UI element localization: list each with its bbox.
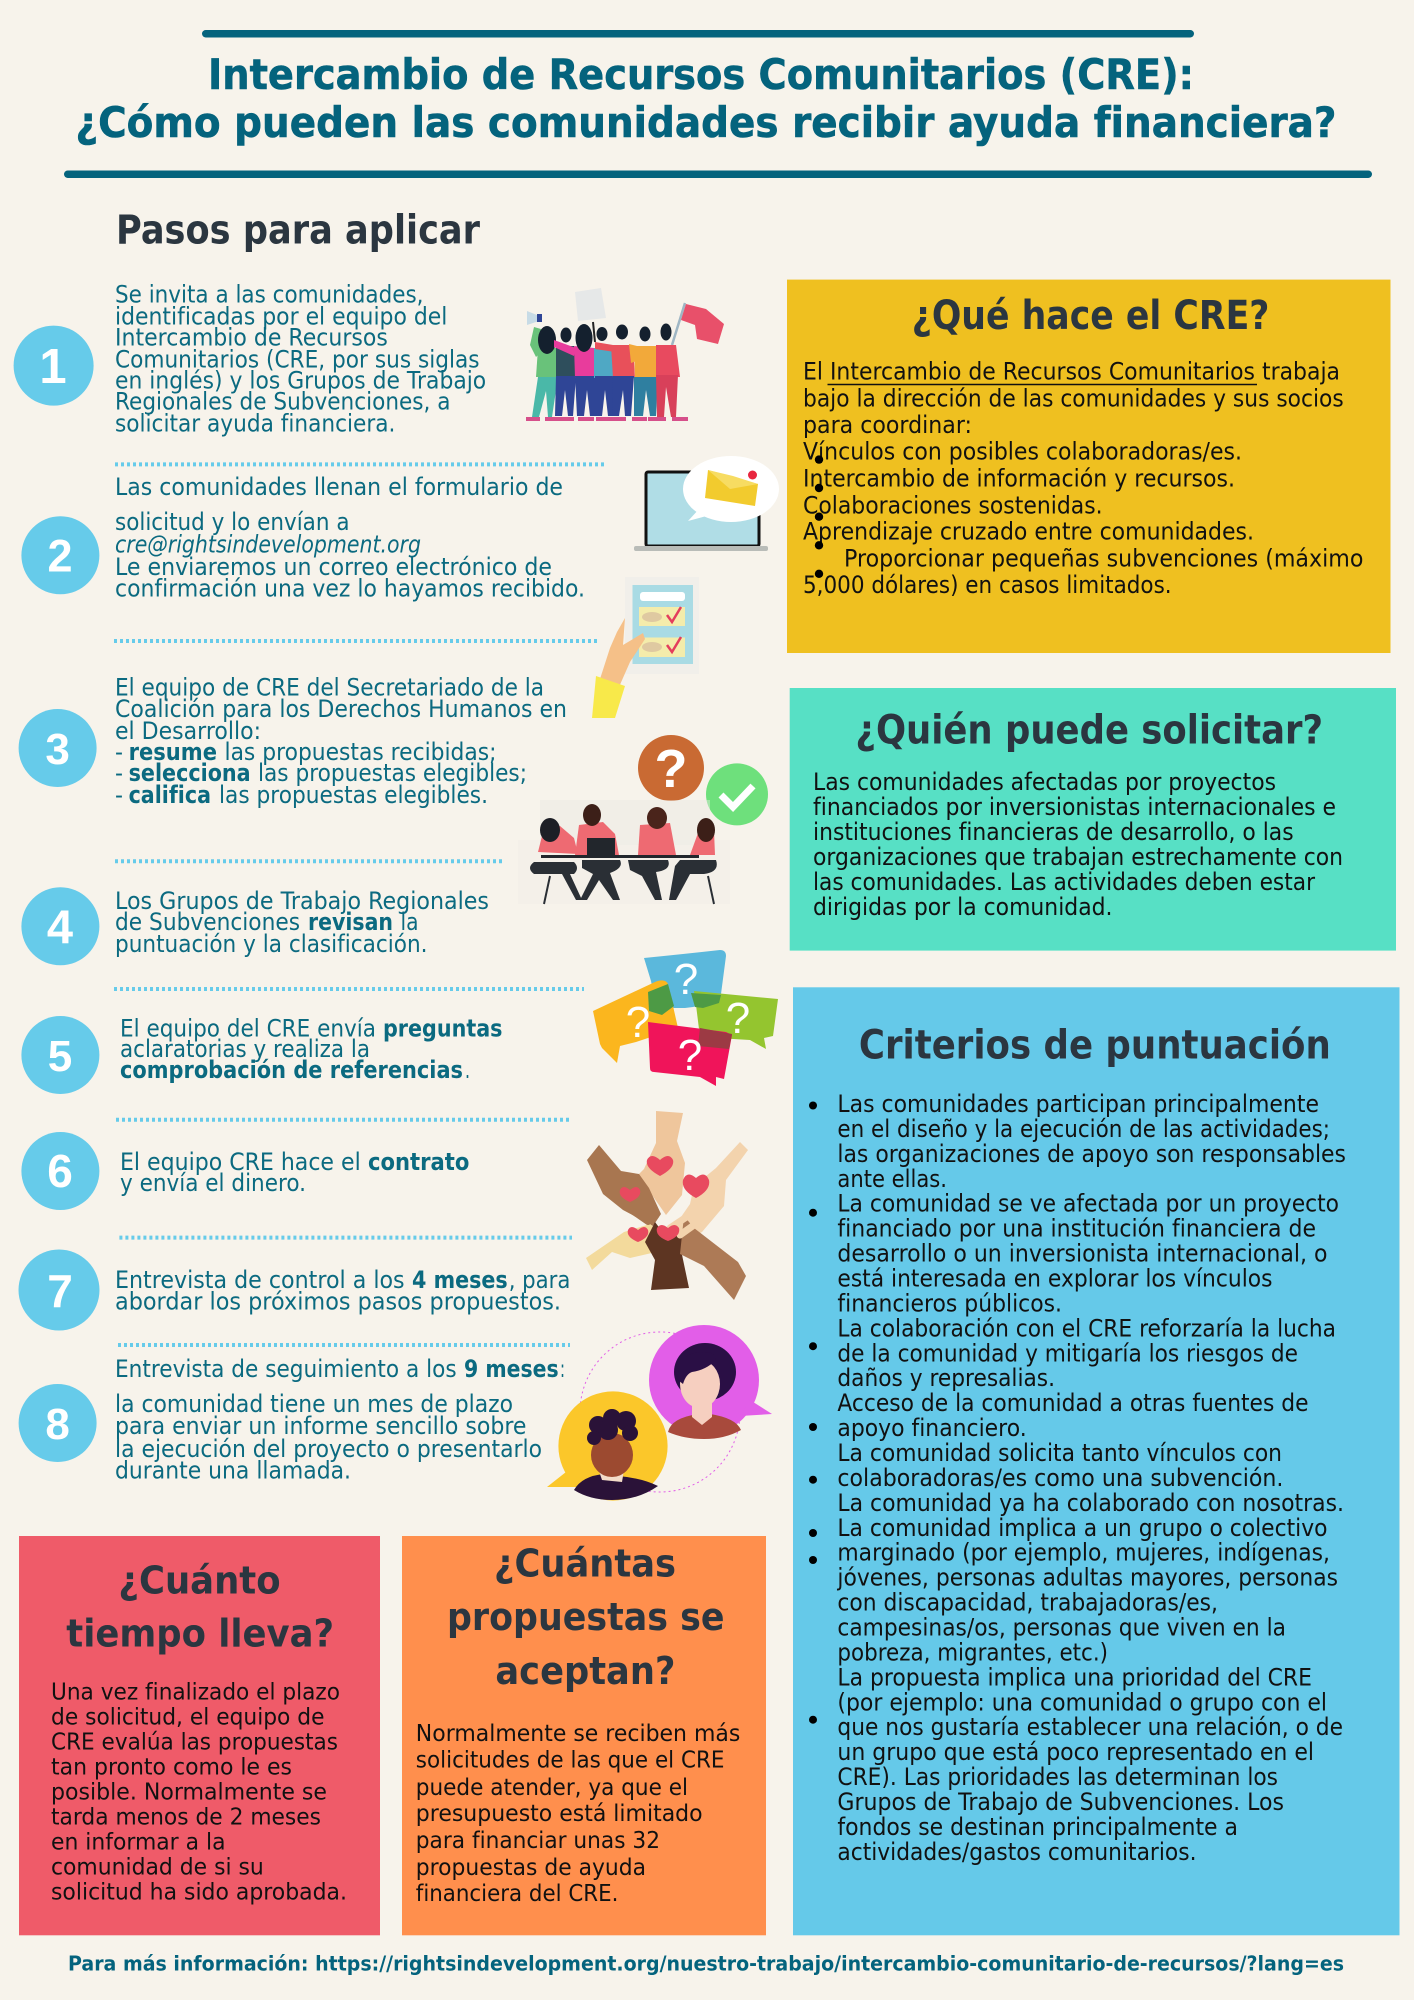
step 4 number xyxy=(21,887,99,965)
step 6 text: El equipo CRE hace el xyxy=(120,1148,361,1176)
step 1 text: Se invita a las comunidades, xyxy=(115,280,424,308)
step 4 text: Los Grupos de Trabajo Regionales xyxy=(115,887,489,915)
step 4 text: de Subvenciones xyxy=(115,908,300,936)
body text: Las comunidades afectadas por proyectos xyxy=(813,768,1276,796)
step 3 text: - xyxy=(115,738,123,766)
step 5 text: El equipo del CRE envía xyxy=(120,1014,376,1042)
criteria list: un grupo que está poco representado en el xyxy=(837,1738,1314,1766)
criteria list: CRE). Las prioridades las determinan los xyxy=(837,1763,1278,1791)
step 3 text: las propuestas recibidas; xyxy=(224,738,496,766)
step 3 number: 3 xyxy=(45,725,70,774)
heading: cuanto tiempo xyxy=(66,1558,334,1656)
heading: pasos para aplicar: Pasos para aplicar xyxy=(116,208,480,254)
body text: solicitudes de las que el CRE xyxy=(416,1748,724,1774)
step 2 text: confirmación una vez lo hayamos recibido. xyxy=(115,574,585,602)
body text: Intercambio de información y recursos. xyxy=(803,464,1235,492)
heading: cuanto tiempo: tiempo lleva? xyxy=(66,1612,334,1656)
body text: El Intercambio de Recursos Comunitarios trabaja xyxy=(803,358,1340,386)
criteria list: apoyo financiero. xyxy=(837,1414,1027,1442)
step 3 text: - xyxy=(115,759,123,787)
body text: dirigidas por la comunidad. xyxy=(813,893,1112,921)
step 4 text: puntuación y la clasificación. xyxy=(115,930,428,958)
step 6 number: 6 xyxy=(47,1145,73,1197)
step 1 text: solicitar ayuda financiera. xyxy=(115,410,395,438)
bullets xyxy=(809,1102,817,1724)
step 2 text: Las comunidades llenan el formulario de xyxy=(115,473,563,501)
criteria list: jóvenes, personas adultas mayores, personas xyxy=(836,1564,1338,1592)
step 5 text: preguntas xyxy=(383,1014,502,1042)
step 8 text: la comunidad tiene un mes de plazo xyxy=(115,1390,513,1418)
icon: overlapping speech bubbles with question marks: ? xyxy=(626,998,650,1047)
body text: financiados por inversionistas internacionales e xyxy=(813,793,1336,821)
step 7 text: abordar los próximos pasos propuestos. xyxy=(115,1288,561,1316)
step 2 number xyxy=(21,516,99,594)
step 3 text: - xyxy=(115,781,123,809)
step 3 text: el Desarrollo: xyxy=(115,717,261,745)
icon: overlapping speech bubbles with question marks: ? xyxy=(726,994,750,1043)
step 2 number: 2 xyxy=(47,530,73,582)
panel: cuanto tiempo lleva xyxy=(19,1536,380,1935)
icon: question mark and check badges xyxy=(638,735,768,825)
step 7 number xyxy=(18,1250,100,1330)
icon: team meeting around a table xyxy=(518,800,730,904)
step 3 text: las propuestas elegibles. xyxy=(219,781,488,809)
body text: bajo la dirección de las comunidades y sus socios xyxy=(803,384,1344,412)
step 5 text xyxy=(120,1014,502,1084)
criteria list: colaboradoras/es como una subvención. xyxy=(837,1464,1283,1492)
title xyxy=(64,30,1372,178)
heading: cuantas propuestas: ¿Cuántas xyxy=(494,1542,676,1586)
step 5 text: . xyxy=(465,1056,470,1084)
criteria list: las organizaciones de apoyo son responsables xyxy=(837,1140,1346,1168)
body text: 5,000 dólares) en casos limitados. xyxy=(803,571,1172,599)
step 7 number: 7 xyxy=(47,1265,73,1317)
step 8 text: para enviar un informe sencillo sobre xyxy=(115,1412,526,1440)
body text: para financiar unas 32 xyxy=(416,1828,660,1854)
step 8 number: 8 xyxy=(45,1400,70,1449)
step 5 text: comprobación de referencias xyxy=(120,1056,463,1084)
step 1 text: Comunitarios (CRE, por sus siglas xyxy=(115,346,480,374)
step 4 text xyxy=(115,887,489,958)
criteria list: de la comunidad y mitigaría los riesgos de xyxy=(837,1339,1298,1367)
step 3 text xyxy=(115,674,567,809)
body text: posible. Normalmente se xyxy=(51,1779,327,1805)
body text: propuestas de ayuda xyxy=(416,1855,646,1881)
body text: Una vez finalizado el plazo xyxy=(51,1679,340,1705)
step 1 text: en inglés) y los Grupos de Trabajo xyxy=(115,367,486,395)
criteria list: La comunidad se ve afectada por un proyecto xyxy=(837,1190,1339,1218)
step 6 text: y envía el dinero. xyxy=(120,1169,306,1197)
body text xyxy=(803,358,1363,599)
body text: presupuesto está limitado xyxy=(416,1801,703,1827)
step 4 text: revisan xyxy=(308,908,393,936)
criteria list: daños y represalias. xyxy=(837,1364,1055,1392)
criteria list: financieros públicos. xyxy=(837,1289,1062,1317)
body text: Normalmente se reciben más xyxy=(416,1721,740,1747)
heading: cuanto tiempo: ¿Cuánto xyxy=(118,1558,281,1602)
step 5 number: 5 xyxy=(48,1032,72,1081)
criteria list: (por ejemplo: una comunidad o grupo con el xyxy=(837,1688,1327,1716)
step 7 text xyxy=(115,1266,570,1316)
criteria list: en el diseño y la ejecución de las actividades; xyxy=(837,1115,1330,1143)
criteria list: La comunidad solicita tanto vínculos con xyxy=(837,1439,1282,1467)
bullets xyxy=(815,455,823,578)
step 2 text: Le enviaremos un correo electrónico de xyxy=(115,553,552,581)
criteria list: con discapacidad, trabajadoras/es, xyxy=(837,1589,1218,1617)
step 1 number xyxy=(14,326,94,406)
criteria list: Las comunidades participan principalmente xyxy=(837,1090,1319,1118)
heading: que hace: ¿Qué hace el CRE? xyxy=(912,293,1269,339)
step 8 number xyxy=(19,1384,97,1462)
criteria list: que nos gustaría establecer una relación, o de xyxy=(837,1713,1343,1741)
step 3 number xyxy=(19,709,97,787)
criteria list: campesinas/os, personas que viven en la xyxy=(837,1614,1286,1642)
step 3 text: Coalición para los Derechos Humanos en xyxy=(115,695,567,723)
body text: Vínculos con posibles colaboradoras/es. xyxy=(803,438,1242,466)
criteria list: actividades/gastos comunitarios. xyxy=(837,1838,1196,1866)
body text: instituciones financieras de desarrollo, o las xyxy=(813,818,1294,846)
panel: que hace el CRE xyxy=(787,280,1390,653)
step 8 text xyxy=(115,1355,565,1484)
step 3 text: El equipo de CRE del Secretariado de la xyxy=(115,674,544,702)
step 1 text: Regionales de Subvenciones, a xyxy=(115,387,450,415)
body text: las comunidades. Las actividades deben estar xyxy=(813,868,1315,896)
criteria list: pobreza, migrantes, etc.) xyxy=(837,1638,1108,1666)
icon: hand ticking a checklist xyxy=(592,577,699,718)
criteria list: La propuesta implica una prioridad del CRE xyxy=(837,1663,1312,1691)
footer link: Para más información: https://rightsindevelopment.org/nuestro-trabajo/intercambio-comunitario-de-recursos/?lang=es xyxy=(68,1952,1344,1976)
body text: solicitud ha sido aprobada. xyxy=(51,1879,347,1905)
body text: puede atender, ya que el xyxy=(416,1775,688,1801)
panel: cuantas propuestas se aceptan xyxy=(402,1536,766,1935)
body text: tarda menos de 2 meses xyxy=(51,1804,321,1830)
body text xyxy=(51,1679,347,1905)
body text: Colaboraciones sostenidas. xyxy=(803,492,1103,520)
step 6 text xyxy=(120,1148,469,1197)
step 8 text: la ejecución del proyecto o presentarlo xyxy=(115,1435,542,1463)
step 2 text: solicitud y lo envían a xyxy=(115,508,350,536)
step 1 number: 1 xyxy=(39,340,67,394)
step 8 text: 9 meses xyxy=(464,1355,559,1383)
criteria list: marginado (por ejemplo, mujeres, indígenas, xyxy=(837,1539,1330,1567)
step 3 text: califica xyxy=(129,781,211,809)
criteria list: Grupos de Trabajo de Subvenciones. Los xyxy=(837,1788,1284,1816)
step 7 text: Entrevista de control a los xyxy=(115,1266,405,1294)
icon: laptop with envelope message xyxy=(634,456,779,551)
panel: criterios de puntuacion xyxy=(793,987,1400,1935)
step 1 text: Intercambio de Recursos xyxy=(115,324,388,352)
criteria list xyxy=(836,1090,1346,1866)
body text: Aprendizaje cruzado entre comunidades. xyxy=(803,518,1254,546)
icon: two people in speech bubbles xyxy=(547,1325,772,1501)
body text: organizaciones que trabajan estrechamente con xyxy=(813,843,1343,871)
heading: quien puede: ¿Quién puede solicitar? xyxy=(855,708,1323,754)
body text xyxy=(416,1721,740,1907)
title: ¿Cómo pueden las comunidades recibir ayuda financiera? xyxy=(76,98,1336,147)
criteria list: está interesada en explorar los vínculos xyxy=(837,1264,1272,1292)
criteria list: La comunidad ya ha colaborado con nosotras. xyxy=(837,1489,1344,1517)
step 5 text: aclaratorias y realiza la xyxy=(120,1035,370,1063)
criteria list: Acceso de la comunidad a otras fuentes de xyxy=(837,1389,1308,1417)
step 3 text: resume xyxy=(129,738,217,766)
step 2 text: cre@rightsindevelopment.org xyxy=(115,530,421,558)
step 8 text: : xyxy=(560,1355,565,1383)
step 4 text: la xyxy=(400,908,418,936)
body text: tan pronto como le es xyxy=(51,1754,292,1780)
body text: en informar a la xyxy=(51,1829,226,1855)
step 8 text: durante una llamada. xyxy=(115,1456,351,1484)
icon: crowd of people with flag xyxy=(526,288,724,421)
step 3 text: selecciona xyxy=(129,759,251,787)
body text: CRE evalúa las propuestas xyxy=(51,1729,338,1755)
panel: quien puede solicitar xyxy=(790,688,1396,951)
body text: financiera del CRE. xyxy=(416,1881,618,1907)
criteria list: La comunidad implica a un grupo o colectivo xyxy=(837,1514,1328,1542)
body text: para coordinar: xyxy=(803,411,972,439)
icon: question mark and check badges: ? xyxy=(654,739,688,799)
heading: cuantas propuestas: propuestas se xyxy=(447,1595,724,1639)
criteria list: ante ellas. xyxy=(837,1165,947,1193)
step 6 number xyxy=(21,1132,99,1210)
step 7 text: 4 meses xyxy=(412,1266,508,1294)
icon: overlapping speech bubbles with question marks xyxy=(593,950,778,1086)
criteria list: desarrollo o un inversionista internacional, o xyxy=(837,1240,1328,1268)
body text: Proporcionar pequeñas subvenciones (máximo xyxy=(844,544,1363,572)
step 1 text xyxy=(115,280,486,438)
heading: criterios: Criterios de puntuación xyxy=(859,1022,1331,1068)
icon: overlapping speech bubbles with question marks: ? xyxy=(674,955,698,1004)
heading: cuantas propuestas xyxy=(447,1542,724,1693)
title: Intercambio de Recursos Comunitarios (CRE): xyxy=(208,50,1194,99)
body text: comunidad de si su xyxy=(51,1854,264,1880)
step 3 text: las propuestas elegibles; xyxy=(258,759,527,787)
step 8 text: Entrevista de seguimiento a los xyxy=(115,1355,457,1383)
body text: de solicitud, el equipo de xyxy=(51,1704,324,1730)
criteria list: La colaboración con el CRE reforzaría la lucha xyxy=(837,1314,1336,1342)
body text xyxy=(813,768,1343,921)
step 2 text xyxy=(115,473,585,602)
icon: hands holding hearts xyxy=(586,1111,748,1300)
step 4 number: 4 xyxy=(47,900,73,953)
icon: overlapping speech bubbles with question marks: ? xyxy=(678,1031,702,1080)
step 5 number xyxy=(21,1016,99,1094)
criteria list: financiado por una institución financiera de xyxy=(837,1215,1316,1243)
step 6 text: contrato xyxy=(368,1148,469,1176)
heading: cuantas propuestas: aceptan? xyxy=(495,1649,675,1693)
step 1 text: identificadas por el equipo del xyxy=(115,302,447,330)
step 7 text: , para xyxy=(509,1266,570,1294)
criteria list: fondos se destinan principalmente a xyxy=(837,1813,1238,1841)
